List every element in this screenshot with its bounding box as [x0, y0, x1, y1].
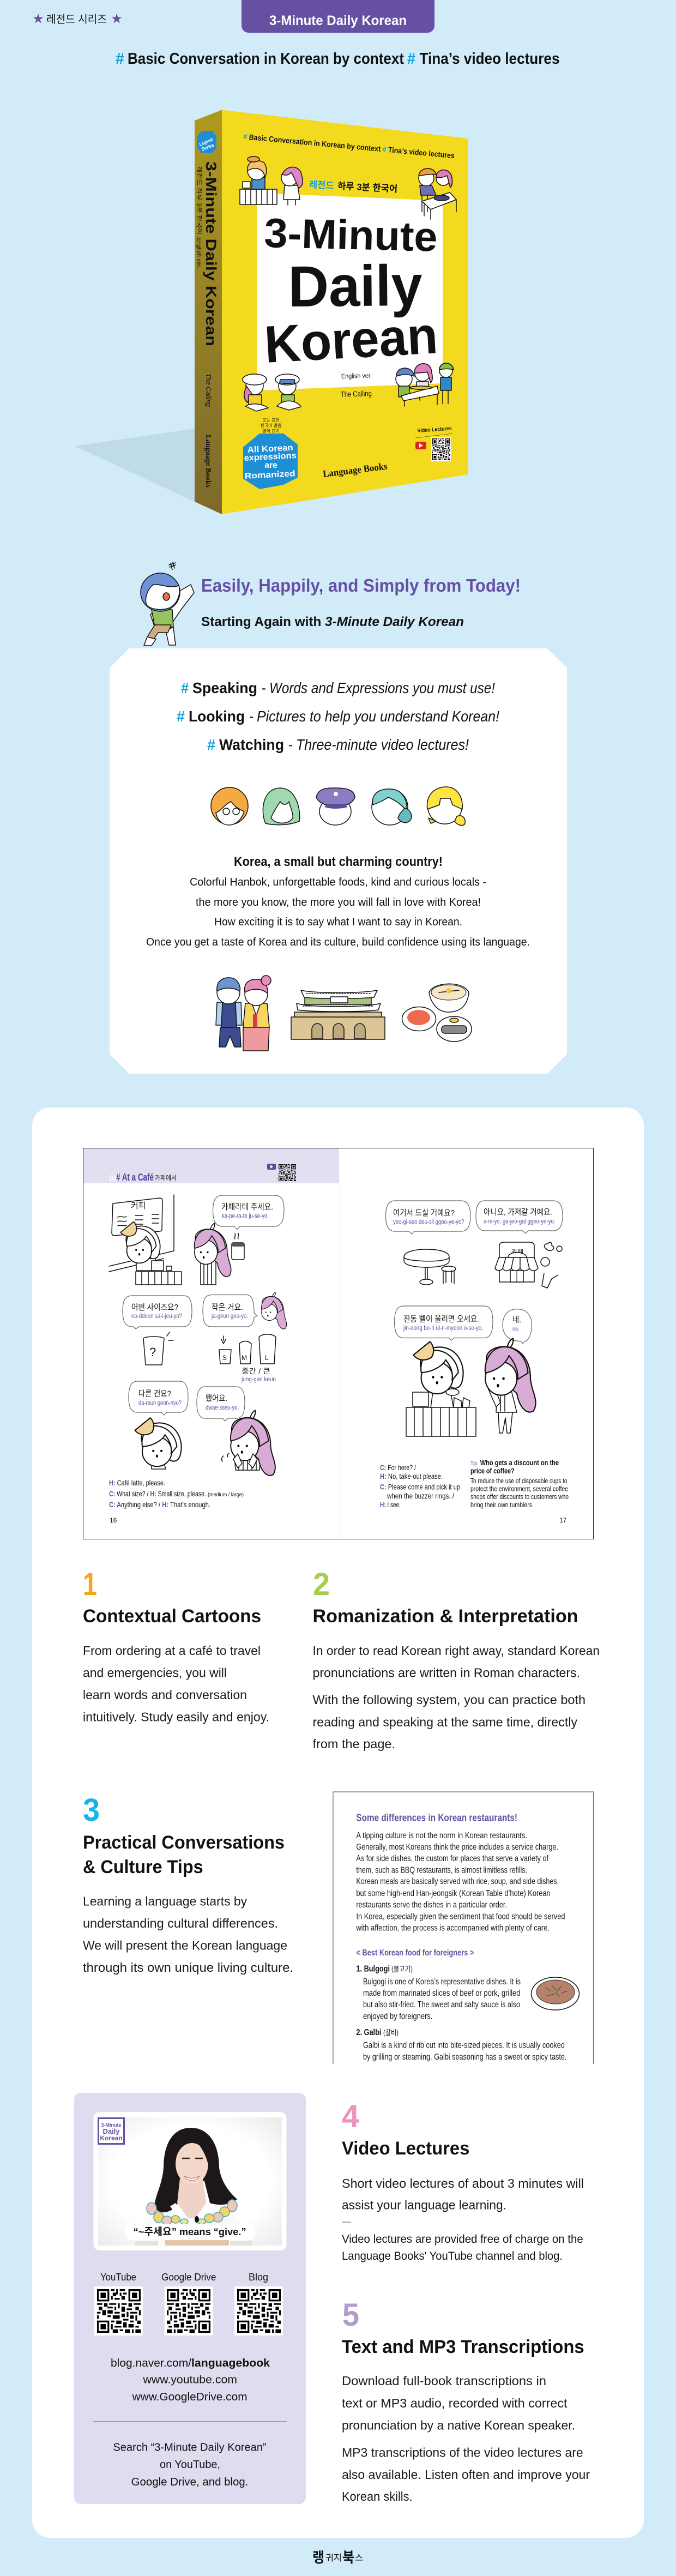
cartoon: coffee sizes: ? [149, 1345, 156, 1359]
links: www.GoogleDrive.com [132, 2391, 248, 2403]
bubble: that's enough: dwae-sseo-yo. [206, 1404, 239, 1411]
cover text: 한국어 발음 [260, 423, 282, 428]
romanized badge [243, 434, 298, 489]
culture tip page [333, 1792, 593, 2064]
series label [33, 13, 122, 26]
best food heading: < Best Korean food for foreigners > [356, 1948, 474, 1958]
logo badge: 3-Minute [101, 2122, 121, 2128]
links: blog.naver.com/ [111, 2357, 191, 2369]
feature list: Speaking [192, 679, 257, 696]
text 3: through its own unique living culture. [83, 1960, 293, 1975]
bubble: that's enough [197, 1387, 245, 1421]
search note: on YouTube, [160, 2458, 220, 2471]
heading 3: Practical Conversations [83, 1832, 285, 1853]
spine text: Legend [198, 137, 214, 147]
number 3: 3 [83, 1792, 100, 1828]
text 1 [83, 1644, 269, 1724]
bubble: small size [203, 1295, 257, 1327]
feature list: - [288, 736, 293, 753]
qr labels [100, 2271, 268, 2283]
cover text: # Basic Conversation in Korean by context # Tina’s video lectures [243, 132, 455, 160]
bubble: cafe latte please [213, 1195, 284, 1230]
text 2: reading and speaking at the same time, directly [313, 1715, 577, 1729]
cartoon: coffee sizes [143, 1332, 276, 1383]
spine text: 레전드 하루 3분 한국어 [196, 166, 203, 234]
cover text: Video Lectures [417, 426, 452, 434]
spread header [109, 1164, 296, 1183]
feature list: Words and Expressions you must use! [269, 679, 495, 696]
text block: korea intro: Colorful Hanbok, unforgettable foods, kind and curious locals - [190, 876, 486, 888]
text 1: and emergencies, you will [83, 1666, 227, 1680]
series label: 레전드 시리즈 [46, 13, 107, 26]
dialogue right: when the buzzer rings. / [387, 1491, 454, 1500]
cover text: Korean [263, 306, 439, 374]
bubble: buzzer: 진동 벨이 울리면 오세요. [403, 1315, 479, 1324]
bubble: take out [476, 1201, 563, 1233]
cartoon: small girl head [262, 1292, 287, 1329]
logo badge: Daily [102, 2127, 120, 2135]
culture tip: To reduce the use of disposable cups to [470, 1477, 568, 1485]
tip page paragraph: As for side dishes, the custom for places that serve a variety of [356, 1854, 548, 1863]
woman illustration [135, 2128, 252, 2246]
subtitle hashtags: Tina’s video lectures [420, 50, 559, 68]
top tab: 3-Minute Daily Korean [269, 13, 407, 28]
text 3: Learning a language starts by [83, 1894, 247, 1909]
series label: ★ [33, 13, 44, 25]
qr labels: Google Drive [161, 2271, 216, 2283]
series label: ★ [111, 13, 122, 25]
text 4: assist your language learning. [342, 2198, 506, 2212]
heading 3: & Culture Tips [83, 1857, 203, 1877]
number 5: 5 [342, 2297, 359, 2333]
tip page heading: Some differences in Korean restaurants! [356, 1812, 517, 1823]
bubble: take out: a-ni-yo, ga-jeo-gal ggeo-ye-yo. [484, 1218, 555, 1225]
text 2: In order to read Korean right away, standard Korean [313, 1644, 600, 1658]
panel: features [32, 1108, 644, 2538]
dialogue right: C: For here? / [380, 1463, 416, 1472]
heading 2: Romanization & Interpretation [313, 1606, 578, 1627]
video lecture marks on cover [415, 434, 453, 461]
dialogue right: H: I see. [380, 1500, 401, 1509]
bubble: anything else [129, 1381, 188, 1415]
text 4: Language Books' YouTube channel and blog. [342, 2250, 563, 2262]
tip page paragraph: A tipping culture is not the norm in Korean restaurants. [356, 1831, 527, 1840]
book shadow [75, 429, 195, 502]
galbi entry: 2. Galbi [356, 2028, 381, 2037]
publisher logo: 북 [342, 2549, 354, 2566]
cartoon: coffee sizes: L [265, 1354, 269, 1362]
bubble: buzzer [395, 1306, 493, 1340]
cover cartoon: table [419, 168, 456, 219]
cartoon: girl at counter [485, 1338, 536, 1433]
subtitle hashtags: # [407, 50, 415, 68]
tip page paragraph: In Korea, especially given the sentiment that food should be served [356, 1912, 565, 1922]
cartoon: barista at counter [406, 1341, 476, 1436]
spread header: # At a Café [116, 1172, 154, 1183]
heading 5: Text and MP3 Transcriptions [342, 2337, 584, 2357]
qr labels: Blog [249, 2271, 268, 2283]
dialogue left: (medium / large) [208, 1492, 244, 1498]
bubble: for here [386, 1201, 470, 1234]
galbi entry: Galbi is a kind of rib cut into bite-sized pieces. It is usually cooked [363, 2041, 565, 2050]
feature 4 [342, 2098, 584, 2262]
bulgogi entry: but also stir-fried. The sweet and salty sauce is also [363, 2000, 520, 2009]
text 5: Korean skills. [342, 2489, 413, 2503]
romanized badge: expressions [244, 451, 297, 463]
feature list: # [181, 679, 189, 696]
tip page paragraph: Generally, most Koreans think the price includes a service charge. [356, 1843, 558, 1852]
text block: korea intro: Korea, a small but charming country! [234, 854, 443, 869]
text 2 [313, 1644, 600, 1751]
cartoon: coffee sizes: M [242, 1354, 247, 1362]
cover cartoon: group at table [396, 363, 454, 406]
bubble: for here: yeo-gi-seo deu-sil ggeo-ye-yo? [393, 1218, 464, 1226]
cartoon: girl refusing [222, 1410, 275, 1476]
tip page paragraph: with affection, the process is accompanied with plenty of care. [356, 1924, 550, 1933]
icon: palace gate [291, 990, 385, 1039]
cover cartoon: cafe [240, 157, 303, 205]
culture tip: price of coffee? [470, 1467, 515, 1475]
bubble: take out: 아니요, 가져갈 거예요. [484, 1208, 552, 1217]
romanized badge: All Korean [247, 443, 293, 455]
bubble: what size: eo-ddeon sa-i-jeu-yo? [131, 1312, 182, 1320]
cover text: 영어 표기 [262, 428, 280, 434]
bulgogi entry: 1. Bulgogi [356, 1965, 390, 1974]
galbi entry [356, 2028, 566, 2062]
links: languagebook [191, 2357, 270, 2369]
text 5: also available. Listen often and improve your [342, 2467, 590, 2482]
tip page paragraph [356, 1831, 565, 1933]
cover text: The Calling [341, 389, 372, 399]
book spine [195, 110, 222, 514]
number 4: 4 [342, 2098, 359, 2134]
feature 2 [313, 1567, 600, 1751]
spread header: 카페에서 [155, 1174, 177, 1182]
tip page paragraph: Korean meals are basically served with rice, soup, and side dishes, [356, 1877, 559, 1886]
panel: video lectures info [74, 2093, 306, 2504]
heading 3 [83, 1832, 285, 1877]
culture tip: protect the environment, several coffee [470, 1485, 568, 1493]
cartoon: barista bust [135, 1418, 182, 1469]
feature list: # [207, 736, 215, 753]
cartoon: coffee sizes: 중간 / 큰 [242, 1367, 270, 1375]
mascot: jumping boy [141, 562, 194, 646]
feature 5 [342, 2297, 590, 2503]
cover text: 하루 3분 한국어 [337, 181, 398, 194]
bulgogi entry: enjoyed by foreigners. [363, 2012, 433, 2021]
bubble: yes: ne. [512, 1325, 520, 1333]
romanized badge: Romanized [244, 469, 295, 481]
cover white panel [257, 193, 443, 390]
bubble: small size: ja-geun geo-yo. [211, 1312, 248, 1320]
bubble: yes [503, 1309, 532, 1344]
publisher logo: 귀지 [325, 2553, 342, 2563]
feature list: Watching [219, 736, 284, 753]
page numbers: 16 [110, 1516, 117, 1524]
subtitle hashtags [116, 50, 559, 68]
feature list: Three-minute video lectures! [296, 736, 469, 753]
bulgogi entry [356, 1965, 521, 2021]
cover text [243, 132, 455, 479]
bubble: that's enough: 됐어요. [206, 1394, 227, 1403]
heading 1: Contextual Cartoons [83, 1606, 261, 1627]
qr codes [94, 2286, 283, 2336]
dialogue right [380, 1463, 460, 1509]
feature list: Looking [189, 708, 245, 725]
romanized badge: are [264, 461, 277, 470]
feature list: Pictures to help you understand Korean! [257, 708, 499, 725]
links: www.youtube.com [142, 2374, 237, 2386]
bubble: cafe latte please: ka-pe-ra-te ju-se-yo. [222, 1212, 269, 1220]
spine text: 3-Minute Daily Korean [203, 161, 219, 346]
bulgogi entry: (불고기) [391, 1965, 413, 1973]
text block: korea intro: Once you get a taste of Korea and its culture, build confidence using its language. [146, 936, 530, 948]
cover cartoon: friends [243, 374, 301, 411]
links [111, 2357, 270, 2403]
culture tip: shops offer discounts to customers who [470, 1493, 569, 1501]
dialogue right: C: Please come and pick it up [380, 1483, 460, 1491]
tip page paragraph: but some high-end Han-jeongsik (Korean Table d’hote) Korean [356, 1889, 551, 1898]
text 2: pronunciations are written in Roman characters. [313, 1666, 580, 1680]
text 4: Short video lectures of about 3 minutes will [342, 2176, 584, 2190]
publisher logo [312, 2549, 363, 2566]
search note: Google Drive, and blog. [131, 2476, 249, 2488]
bubble: anything else: 다른 건요? [138, 1389, 171, 1398]
book front cover [222, 110, 468, 514]
text 4 [342, 2176, 584, 2262]
feature list [177, 679, 499, 753]
culture tip: Tip. Who gets a discount on the [470, 1459, 559, 1467]
cartoon: coffee sizes: jung-gan keun [241, 1375, 276, 1383]
search note [113, 2441, 267, 2488]
dialogue left: C: Anything else? / H: That’s enough. [109, 1500, 210, 1509]
tip page paragraph: restaurants serve the dishes in a particular order. [356, 1900, 507, 1910]
icon: five faces [211, 787, 465, 826]
subtitle hashtags: # [116, 50, 124, 68]
video caption: “~주세요” means “give.” [134, 2226, 246, 2237]
text 5: Download full-book transcriptions in [342, 2374, 546, 2388]
publisher logo: 랭 [312, 2549, 324, 2566]
text 1: From ordering at a café to travel [83, 1644, 261, 1658]
cartoon: table and stool [404, 1249, 456, 1285]
spine text: The Calling [204, 374, 213, 407]
spine text: English ver. [196, 237, 202, 268]
icon: korean food [402, 984, 472, 1042]
spine text [196, 131, 219, 488]
bulgogi entry: Bulgogi is one of Korea’s representative dishes. It is [363, 1977, 521, 1987]
cover text: Daily [288, 254, 422, 319]
number 2: 2 [313, 1567, 330, 1602]
cover text: 모든 표현 [262, 418, 280, 423]
publisher logo: 스 [355, 2554, 363, 2563]
cover text: English ver. [341, 372, 372, 380]
spine text: Series [201, 142, 215, 152]
text 5: MP3 transcriptions of the video lectures are [342, 2445, 583, 2459]
feature 1 [83, 1567, 269, 1724]
cartoon: cafe shop [495, 1242, 562, 1288]
cartoon: girl with coffee [195, 1223, 244, 1285]
bubble: for here: 여기서 드실 거예요? [393, 1208, 455, 1218]
bubble: anything else: da-reun geon-nyo? [138, 1399, 182, 1407]
cartoon: cafe shop: 카페 [511, 1249, 523, 1255]
sample spread [83, 1148, 593, 1539]
search note: Search “3-Minute Daily Korean” [113, 2441, 267, 2454]
feature list: # [177, 708, 185, 725]
text 3: We will present the Korean language [83, 1939, 287, 1953]
spread header: 01 [109, 1173, 118, 1182]
video caption [125, 2224, 255, 2240]
cartoon: barista at menu [109, 1195, 182, 1285]
text 3: understanding cultural differences. [83, 1916, 278, 1930]
text 2: With the following system, you can practice both [313, 1693, 586, 1707]
text 5: text or MP3 audio, recorded with correct [342, 2396, 568, 2410]
cartoon: coffee sizes: S [222, 1354, 227, 1362]
cover text: 3-Minute [264, 210, 438, 261]
feature 3 [83, 1792, 293, 1975]
qr labels: YouTube [100, 2271, 136, 2283]
cartoon: barista at menu: 커피 [131, 1201, 146, 1211]
icon: bulgogi plate [531, 1977, 579, 2010]
feature list: - [249, 708, 254, 725]
feature list: - [262, 679, 266, 696]
cover text: Language Books [322, 461, 388, 479]
logo badge: Korean [100, 2134, 123, 2142]
subtitle hashtags: Basic Conversation in Korean by context [128, 50, 404, 68]
heading 4: Video Lectures [342, 2138, 469, 2159]
bubble: what size [123, 1296, 192, 1329]
bubble: cafe latte please: 카페라테 주세요. [221, 1202, 273, 1212]
icon: couple in hanbok [216, 976, 271, 1051]
logo badge [98, 2118, 124, 2144]
culture tip: bring their own tumblers. [470, 1501, 534, 1509]
text 5: pronunciation by a native Korean speaker. [342, 2418, 575, 2432]
bubble: yes: 네. [512, 1315, 521, 1325]
page numbers [110, 1516, 567, 1524]
cover text: 레전드 [309, 179, 334, 191]
text 4: Video lectures are provided free of charge on the [342, 2233, 583, 2246]
text 1: learn words and conversation [83, 1688, 247, 1702]
tip page paragraph: them, such as BBQ restaurants, is almost limitless refills. [356, 1866, 527, 1875]
page numbers: 17 [559, 1516, 567, 1524]
text 2: from the page. [313, 1737, 395, 1751]
subheading: starting again: Starting Again with 3-Minute Daily Korean [201, 615, 464, 629]
galbi entry: by grilling or steaming. Galbi seasoning has a sweet or spicy taste. [363, 2053, 566, 2062]
dialogue left: C: What size? / H: Small size, please. [109, 1489, 206, 1498]
dialogue right: H: No, take-out please. [380, 1472, 443, 1480]
number 1: 1 [83, 1567, 97, 1602]
book mockup [75, 110, 468, 514]
bubble: buzzer: jin-dong be-ri ul-ri-myeon o-se-yo. [403, 1324, 483, 1332]
culture tip [470, 1459, 569, 1509]
bulgogi entry: made from marinated slices of beef or pork, grilled [363, 1989, 520, 1998]
text block: korea intro: How exciting it is to say what I want to say in Korean. [214, 916, 462, 928]
panel: intro octagon [110, 648, 567, 1074]
text block: korea intro [146, 854, 530, 948]
galbi entry: (갈비) [383, 2029, 399, 2037]
text block: korea intro: the more you know, the more you will fall in love with Korea! [196, 896, 481, 908]
text 5 [342, 2374, 590, 2503]
top tab [242, 0, 434, 33]
heading: easily happily simply: Easily, Happily, and Simply from Today! [201, 575, 521, 595]
dialogue left [109, 1478, 244, 1509]
bubble: small size: 작은 거요. [212, 1303, 243, 1312]
text 1: intuitively. Study easily and enjoy. [83, 1710, 269, 1724]
bubble: what size: 어떤 사이즈요? [131, 1303, 178, 1312]
text 3 [83, 1894, 293, 1975]
dialogue left: H: Café latte, please. [109, 1478, 165, 1487]
spine text: Language Books [204, 435, 212, 488]
video still [94, 2112, 287, 2250]
